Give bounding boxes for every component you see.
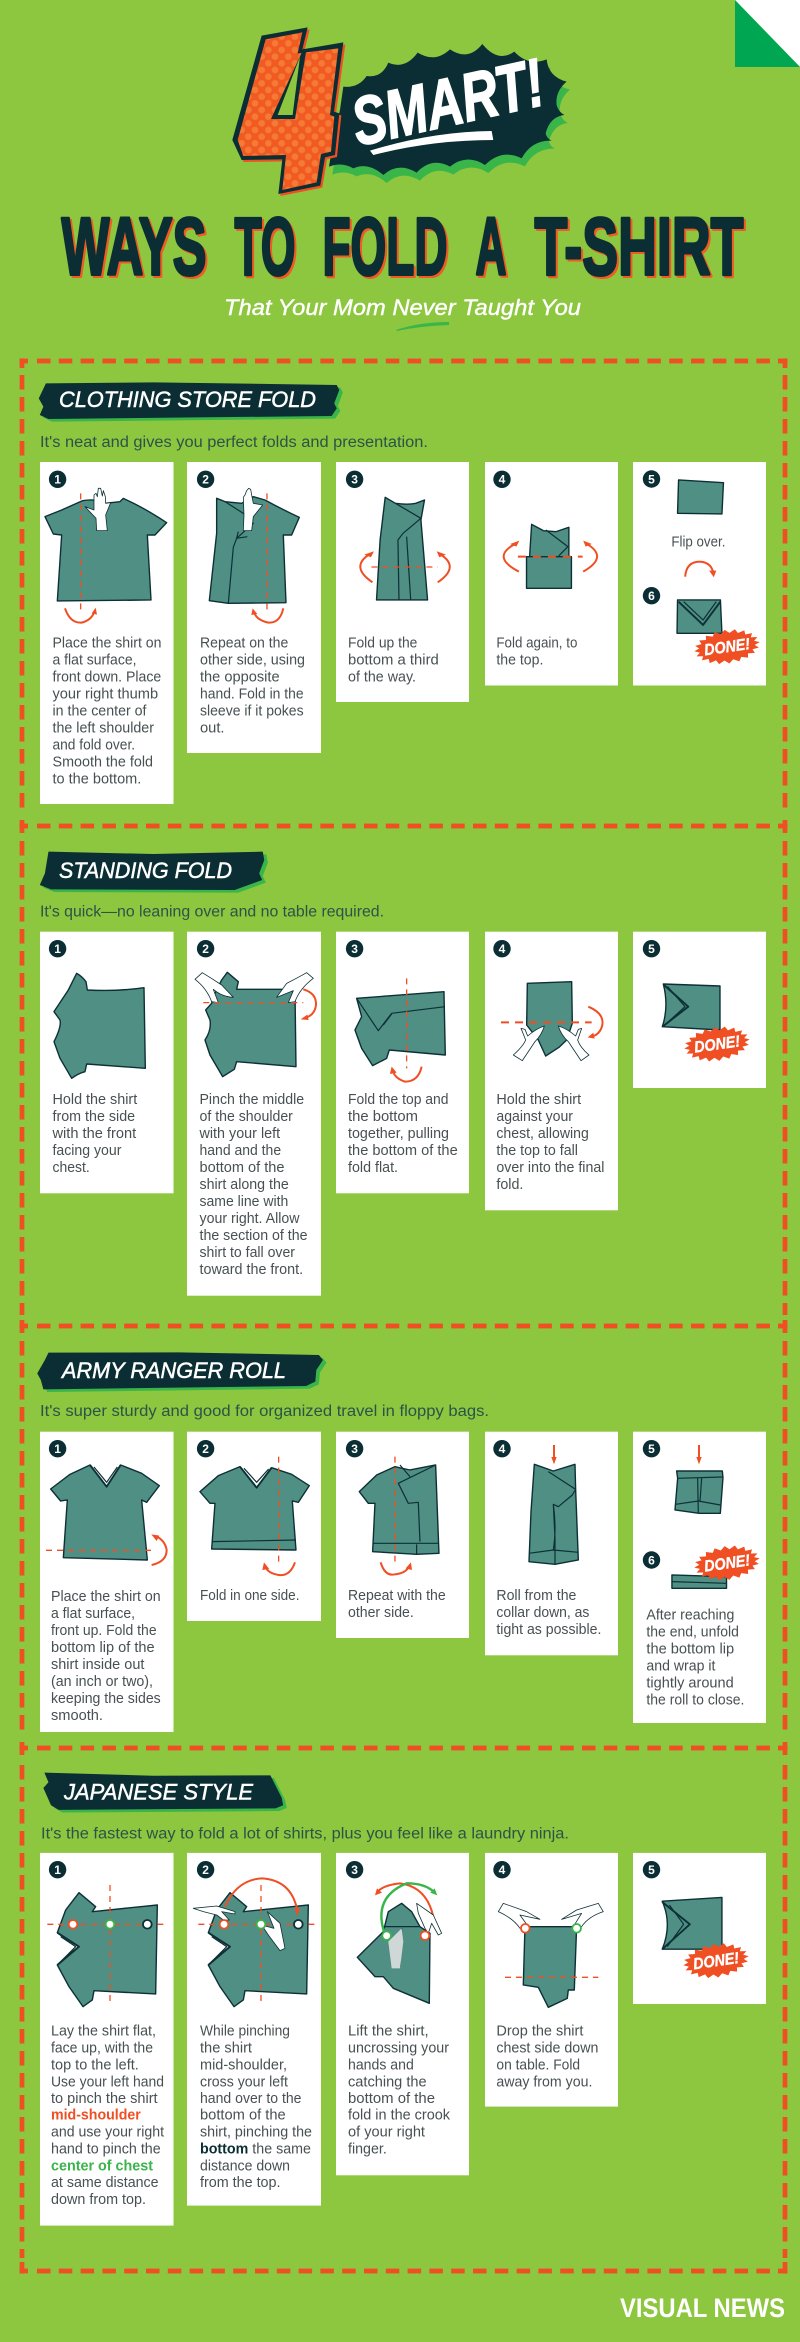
- step 3: the bottom of the: [348, 1142, 458, 1159]
- step 3: Fold up the: [348, 634, 417, 651]
- step 2: hand and the: [200, 1142, 281, 1159]
- step 1: in the center of: [52, 702, 147, 719]
- step 2: out.: [200, 719, 224, 736]
- step 1: at same distance: [51, 2174, 159, 2191]
- done badge: [692, 1542, 762, 1584]
- step 1: with the front: [52, 1125, 137, 1142]
- step 2: 2: [202, 942, 209, 956]
- heading: clothing store fold: [39, 382, 343, 422]
- step 5 and 6: After reaching: [646, 1606, 734, 1623]
- step 2: [187, 1432, 321, 1621]
- step 5 and 6: 5: [648, 1442, 655, 1456]
- heading: japanese style: JAPANESE STYLE: [63, 1780, 253, 1804]
- subtitle: [224, 295, 581, 331]
- step 3: 3: [351, 942, 358, 956]
- step 3: finger.: [348, 2140, 387, 2157]
- step 4: against your: [496, 1108, 573, 1125]
- step 1: Hold the shirt: [52, 1091, 138, 1108]
- step 3: 3: [351, 473, 358, 487]
- step 5 and 6: and wrap it: [646, 1657, 716, 1674]
- step 2: [187, 462, 321, 753]
- step 2: the shirt: [200, 2040, 253, 2056]
- panel: standing fold: [40, 852, 766, 1296]
- step 1: and use your right: [51, 2124, 165, 2140]
- step 4: on table. Fold: [496, 2056, 580, 2073]
- step 2: of the shoulder: [200, 1108, 293, 1125]
- step 4: Roll from the: [496, 1587, 576, 1604]
- step 5 and 6: [633, 462, 766, 686]
- description: It's super sturdy and good for organized travel in floppy bags.: [40, 1403, 489, 1420]
- main title: FOLD: [322, 202, 448, 292]
- step 4: away from you.: [496, 2073, 592, 2090]
- step 1: Lay the shirt flat,: [51, 2023, 156, 2040]
- step 4: 4: [499, 473, 506, 487]
- step 3: Fold the top and: [348, 1091, 448, 1108]
- heading: army ranger roll: ARMY RANGER ROLL: [60, 1358, 286, 1383]
- step 3: Repeat with the: [348, 1587, 446, 1604]
- step 3: of the way.: [348, 668, 416, 685]
- step 5: [633, 1853, 766, 2004]
- step 4: 4: [499, 1863, 506, 1877]
- step 4: 4: [499, 1442, 506, 1456]
- step 2: bottom of the: [200, 1159, 284, 1176]
- step 2: your right. Allow: [200, 1210, 300, 1227]
- step 1: [40, 1432, 174, 1732]
- step 4: chest, allowing: [496, 1125, 589, 1142]
- step 1: face up, with the: [51, 2040, 153, 2056]
- title logo: 4 Smart: SMART!: [345, 44, 551, 161]
- step 2: Repeat on the: [200, 634, 288, 651]
- panel: army ranger roll: [37, 1352, 766, 1732]
- step 1: Place the shirt on: [52, 634, 162, 651]
- step 1: Place the shirt on: [51, 1588, 161, 1605]
- step 2: other side, using: [200, 651, 305, 668]
- step 4: [485, 1432, 618, 1655]
- step 5: 5: [648, 1863, 655, 1877]
- step 2: Pinch the middle: [200, 1091, 304, 1108]
- done badge: DONE!: [703, 1552, 752, 1576]
- step 1: your right thumb: [52, 685, 158, 702]
- step 5 and 6: 6: [648, 589, 655, 603]
- step 2: 2: [202, 1442, 209, 1456]
- step 3: 3: [351, 1863, 358, 1877]
- step 2: bottom the same: [200, 2140, 311, 2157]
- step 1: bottom lip of the: [51, 1639, 155, 1656]
- step 4: chest side down: [496, 2040, 598, 2056]
- step 2: Fold in one side.: [200, 1587, 300, 1604]
- done badge: DONE!: [693, 1033, 742, 1057]
- step 3: of your right: [348, 2124, 426, 2140]
- main title: WAYS: [64, 204, 208, 294]
- main title: TO: [236, 204, 298, 294]
- step 1: facing your: [52, 1142, 121, 1159]
- dashed frame: [20, 358, 788, 2274]
- step 1: [40, 462, 174, 804]
- step 5 and 6: the end, unfold: [646, 1623, 739, 1640]
- step 2: hand. Fold in the: [200, 685, 304, 702]
- description: It's the fastest way to fold a lot of shirts, plus you feel like a laundry ninja.: [41, 1826, 569, 1843]
- heading: clothing store fold: CLOTHING STORE FOLD: [59, 387, 316, 412]
- corner page fold: [735, 0, 800, 67]
- step 5 and 6: the bottom lip: [646, 1640, 734, 1657]
- step 2: hand over to the: [200, 2090, 302, 2107]
- step 1: [40, 932, 174, 1193]
- step 3: [336, 1853, 469, 2175]
- step 2: While pinching: [200, 2023, 290, 2040]
- step 3: 3: [351, 1442, 358, 1456]
- step 4: over into the final: [496, 1159, 604, 1176]
- step 1: mid-shoulder: [51, 2107, 141, 2124]
- step 4: collar down, as: [496, 1604, 589, 1621]
- step 2: bottom of the: [200, 2107, 286, 2124]
- step 3: [336, 932, 469, 1193]
- step 1: a flat surface,: [51, 1605, 135, 1622]
- step 1: smooth.: [51, 1707, 103, 1724]
- step 2: shirt along the: [200, 1176, 289, 1193]
- step 2: [187, 1853, 321, 2206]
- step 1: 1: [54, 473, 61, 487]
- step 1: and fold over.: [52, 736, 135, 753]
- step 2: with your left: [199, 1125, 281, 1142]
- subtitle: That Your Mom Never Taught You: [224, 295, 581, 320]
- step 1: center of chest: [51, 2157, 153, 2174]
- step 1: keeping the sides: [51, 1690, 161, 1707]
- step 1: 1: [54, 942, 61, 956]
- step 3: the bottom: [348, 1108, 418, 1125]
- heading: standing fold: [40, 852, 268, 893]
- step 4: [485, 932, 618, 1210]
- step 1: down from top.: [51, 2191, 146, 2208]
- step 2: shirt to fall over: [200, 1244, 295, 1261]
- step 1: Smooth the fold: [52, 753, 153, 770]
- step 4: the top to fall: [496, 1142, 578, 1159]
- step 1: from the side: [52, 1108, 135, 1125]
- step 3: fold flat.: [348, 1159, 398, 1176]
- heading: army ranger roll: [37, 1352, 327, 1392]
- done badge: DONE!: [703, 636, 752, 659]
- step 2: toward the front.: [200, 1261, 303, 1278]
- main title: A: [476, 202, 506, 292]
- step 4: Drop the shirt: [496, 2023, 584, 2040]
- step 3: together, pulling: [348, 1125, 449, 1142]
- step 3: other side.: [348, 1604, 414, 1621]
- step 1: front down. Place: [52, 668, 161, 685]
- step 2: cross your left: [200, 2073, 289, 2090]
- step 3: [336, 462, 469, 702]
- step 4: [485, 1853, 618, 2107]
- panel: japanese style: [40, 1773, 766, 2226]
- step 1: a flat surface,: [52, 651, 136, 668]
- step 4: fold.: [496, 1176, 523, 1193]
- step 1: Use your left hand: [51, 2073, 164, 2090]
- step 5 and 6: the roll to close.: [646, 1691, 744, 1708]
- done badge: [692, 625, 762, 668]
- step 5 and 6: 5: [648, 472, 655, 486]
- step 3: Lift the shirt,: [348, 2023, 429, 2040]
- main title: A: [478, 204, 508, 294]
- step 1: to pinch the shirt: [51, 2090, 158, 2107]
- step 3: [336, 1432, 469, 1638]
- step 3: hands and: [348, 2056, 414, 2073]
- step 2: sleeve if it pokes: [200, 702, 304, 719]
- step 1: top to the left.: [51, 2056, 139, 2073]
- step 4: Hold the shirt: [496, 1091, 582, 1108]
- done badge: [681, 1939, 751, 1982]
- main title: TO: [234, 202, 296, 292]
- done badge: DONE!: [692, 1950, 741, 1973]
- step 2: mid-shoulder,: [200, 2056, 287, 2073]
- step 1: 1: [54, 1863, 61, 1877]
- main title: WAYS: [62, 202, 206, 292]
- step 4: 4: [499, 942, 506, 956]
- step 1: the left shoulder: [52, 719, 154, 736]
- main title: [62, 202, 746, 294]
- step 5 and 6: tightly around: [646, 1674, 734, 1691]
- step 1: hand to pinch the: [51, 2140, 161, 2157]
- step 5 and 6: Flip over.: [671, 534, 725, 551]
- done badge: [682, 1023, 752, 1065]
- description: It's quick—no leaning over and no table required.: [40, 904, 384, 921]
- step 1: 1: [54, 1442, 61, 1456]
- step 5: [633, 932, 766, 1088]
- step 5: 5: [648, 942, 655, 956]
- heading: standing fold: STANDING FOLD: [59, 858, 232, 883]
- step 1: chest.: [52, 1159, 90, 1176]
- title logo: 4 Smart: [232, 27, 570, 196]
- step 4: the top.: [496, 651, 543, 668]
- step 4: tight as possible.: [496, 1621, 601, 1638]
- step 2: shirt, pinching the: [200, 2124, 312, 2140]
- step 3: bottom of the: [348, 2090, 435, 2107]
- step 1: shirt inside out: [51, 1656, 145, 1673]
- panel: clothing store fold: [39, 382, 766, 804]
- step 5 and 6: [633, 1432, 766, 1723]
- step 2: distance down: [200, 2157, 290, 2174]
- step 5 and 6: 6: [648, 1553, 655, 1567]
- heading: japanese style: [43, 1773, 287, 1813]
- step 2: the section of the: [200, 1227, 308, 1244]
- step 3: uncrossing your: [348, 2040, 449, 2056]
- step 2: 2: [202, 1863, 209, 1877]
- step 2: 2: [202, 473, 209, 487]
- step 1: [40, 1853, 174, 2226]
- step 2: same line with: [200, 1193, 288, 1210]
- main title: FOLD: [324, 204, 450, 294]
- description: It's neat and gives you perfect folds and presentation.: [40, 434, 428, 451]
- step 3: catching the: [348, 2073, 427, 2090]
- step 1: front up. Fold the: [51, 1622, 157, 1639]
- step 3: fold in the crook: [348, 2107, 450, 2124]
- step 4: [485, 462, 618, 686]
- step 4: Fold again, to: [496, 634, 577, 651]
- step 2: [187, 932, 321, 1296]
- step 3: bottom a third: [348, 651, 439, 668]
- step 2: the opposite: [200, 668, 280, 685]
- step 1: to the bottom.: [52, 770, 141, 787]
- step 2: from the top.: [200, 2174, 280, 2191]
- step 1: (an inch or two),: [51, 1673, 153, 1690]
